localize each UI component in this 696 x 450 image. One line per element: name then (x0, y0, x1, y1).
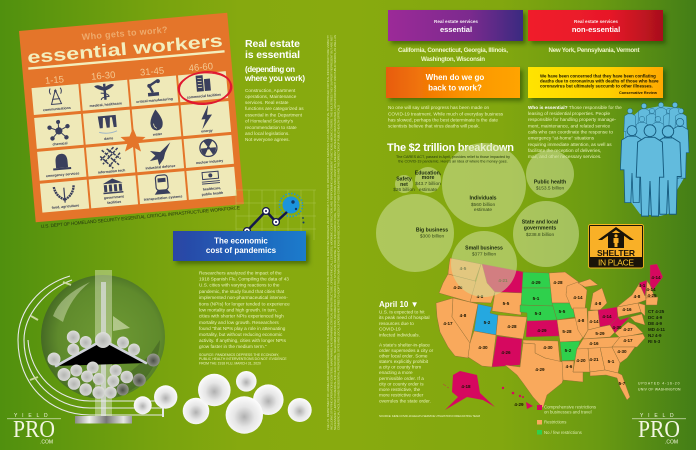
text block: back to work body: scientists believe that virus deaths will peak. (388, 124, 480, 129)
state date labels: 4-8 (634, 294, 641, 299)
text block: who is essential (528, 105, 622, 159)
text block: pandemics body: pandemic, the study found that cities that (199, 289, 285, 294)
list: essential states: California, Connecticut, Georgia, Illinois, (398, 47, 508, 54)
icon: information tech: information tech (98, 168, 125, 175)
source caption: U.S. DEPT OF HOMELAND SECURITY ESSENTIAL CRITICAL INFRASTRUCTURE WORKFORCE (41, 205, 240, 229)
text block: April 10 body: U.S. is expected to hit (379, 310, 425, 314)
heading: real estate is essential: Real estate (245, 38, 300, 50)
icon: transportation systems (142, 173, 183, 202)
title: essential workers: essential workers (26, 30, 224, 67)
state date labels: 5-29 (595, 331, 605, 336)
panel: conservative review quote: We have been concerned that they have been conflating (540, 74, 656, 78)
text block: pandemics body: activity. If anything, cities with longer NPIs (199, 338, 287, 343)
text block: pandemics body: Researchers analyzed the impact of the (199, 270, 282, 276)
bubble labels (393, 170, 566, 258)
panel: conservative review quote (528, 67, 663, 98)
state date labels: 5-2 (565, 348, 572, 353)
icon: energy: energy (201, 129, 213, 133)
states: Alaska and Hawaii (443, 371, 533, 410)
state date labels: 5-5 (503, 301, 510, 306)
states: east (566, 264, 663, 400)
panel: economic cost of pandemics: cost of pandemics (206, 246, 277, 255)
state date labels: 5-28 (562, 329, 572, 334)
text block: real estate body (245, 88, 304, 142)
state date labels: 5-5 (559, 309, 566, 314)
state date labels: 4-8 (460, 313, 467, 318)
state date labels: 4-8 (578, 318, 585, 323)
update note (638, 382, 681, 392)
icon: industrial defense (143, 142, 176, 170)
state date labels: 4-30 (543, 345, 553, 350)
illustration: lottery machine (18, 270, 165, 424)
icon: food, agriculture (50, 184, 79, 210)
text block: back to work body (388, 105, 504, 129)
bubble labels: $26 billion (393, 187, 415, 193)
text block: April 10 body: COVID-19 (379, 326, 401, 332)
bubble labels: Individuals (469, 196, 497, 202)
state date labels (443, 266, 661, 407)
text block: April 10 body: state's explicitly prohibit (379, 359, 429, 364)
text block: pandemics body: low mortality and high growth. In turn, (199, 308, 277, 312)
text block: April 10 body: more restrictive order (379, 392, 424, 398)
subtitle: CARES Act: The CARES ACT, passed in April, provides relief to those impacted by (396, 155, 510, 159)
state date labels: 4-18 (461, 384, 471, 389)
states: central (505, 272, 583, 408)
state date labels: 4-17 (443, 321, 453, 326)
source: pandemics: PUBLIC HEALTH INTERVENTIONS DO NOT: EVIDENCE (199, 357, 287, 361)
list: small state dates: CT 4-25 (648, 309, 665, 314)
state date labels: 5-1 (533, 296, 540, 301)
state date labels: 4-17 (623, 338, 633, 343)
icon: medical (88, 82, 122, 108)
state date labels: 4-30 (617, 349, 627, 354)
vertical fine print (326, 35, 340, 430)
legend: map restrictions: Comprehensive restrictions (544, 404, 596, 410)
heading: 2 trillion breakdown: The $2 trillion breakdown (387, 142, 514, 154)
text block: who is essential: facilitate the reception of deliveries, (528, 148, 601, 153)
text block: pandemics body: 1918 Spanish Flu. Compiling the data of 43 (199, 276, 289, 282)
legend: map restrictions: Restrictions (544, 420, 566, 424)
text block: April 10 body: permissible order. If a (379, 376, 424, 381)
panel: when do we go back to work (386, 67, 520, 98)
panel: conservative review quote: Conservative Review (619, 91, 657, 95)
icon: healthcare, public health (200, 171, 223, 197)
state date labels: 4-14 (651, 275, 661, 280)
text block: real estate body: Construction, Apartment (245, 88, 296, 93)
text block: pandemics body: mortality and low growth. Researchers (199, 320, 279, 325)
icon: dams (98, 115, 118, 141)
text block: April 10 body: a city or county from (379, 364, 421, 370)
vertical fine print: INCLUDING STAFFING OPERATIONS CENTERS, MAINTAINING AND REPAIRING CRITICAL INFRASTRUCTURE, OPERATING CALL CENTERS, WORKING CONSTRUCTION, AND PERFORMING MANAGEMENT FUNCTIONS, AMONG OTHERS. THE INDUSTRIES THEY SUPPORT REPRESENT BUT ARE NOT (330, 35, 334, 430)
highlight: red circle around commercial facilities (177, 69, 233, 107)
text block: who is essential: Who is essential? Those responsible for the (528, 105, 622, 110)
text block: April 10 body: city or county order is (379, 382, 424, 386)
logo: yield pro left: PRO (13, 417, 55, 443)
state date labels: 4-28 (553, 280, 563, 285)
icon: commercial facilities (185, 74, 221, 100)
rails (18, 276, 163, 417)
balls inside drum (48, 330, 160, 399)
icon: energy (199, 105, 214, 133)
icon: government facilities: government (104, 194, 125, 200)
text block: who is essential: emergency "at-home" situations (528, 136, 595, 140)
state date labels: 4-26 (453, 285, 463, 290)
text block: pandemics body: tions (NPIs) for longer tended to experience (199, 302, 290, 306)
state date labels: 4-14 (646, 287, 656, 292)
update note: UNIV OF WASHINGTON (638, 388, 681, 392)
bubble labels: $300 billion (420, 234, 444, 240)
state date labels: 4-21 (589, 357, 599, 362)
text block: April 10 body: infected individuals. (379, 332, 420, 338)
panel: essential states: essential (440, 25, 472, 34)
vertical fine print: THE U.S. DEPARTMENT OF HOMELAND SECURITY GUIDANCE ON THE ESSENTIAL CRITICAL INFRASTRUCTURE WORKFORCE IDENTIFIES WORKERS WHO CONDUCT A RANGE OF OPERATIONS AND SERVICES THAT ARE ESSENTIAL TO CONTINUED CRITICAL INFRASTRUCTURE VIABILITY (326, 35, 330, 430)
panel: non-essential states: Real estate services (574, 19, 618, 24)
icon: shelter in place sign: SHELTER (597, 248, 635, 258)
logo: yield pro right: PRO (638, 417, 680, 443)
list: small state dates: DC 4-9 (648, 315, 663, 320)
text block: who is essential: mail, and other necessary services. (528, 154, 601, 159)
logo: yield pro right (632, 413, 686, 446)
text block: real estate body: services. Real estate (245, 100, 289, 105)
column headers: 16-30 (91, 70, 116, 83)
bubble labels: Public health (534, 180, 566, 186)
panel: essential states (388, 10, 523, 41)
text block: April 10 body: A state's shelter-in-place (379, 342, 430, 348)
state date labels: 4-1 (639, 283, 646, 288)
legend: map restrictions: on businesses and travel (544, 410, 592, 414)
state date labels: 5-7 (619, 381, 626, 386)
state date labels: 4-26 (501, 350, 511, 355)
icon: communications (41, 87, 71, 112)
state date labels: 4-29 (535, 367, 545, 372)
state date labels: 5-2 (484, 320, 491, 325)
illustration: crowd of workers (620, 102, 689, 216)
state date labels: 4-14 (602, 314, 612, 319)
state date labels: 4-25 (647, 293, 657, 298)
icon: transportation systems: transportation systems (144, 194, 183, 202)
bubble labels: Education, (415, 170, 442, 176)
text block: pandemics body: found "that NPIs play a role in attenuating (199, 326, 286, 331)
panel: essential states: Real estate services (434, 19, 478, 24)
icon: chemical (47, 119, 71, 147)
vertical fine print: COMMERCIAL FACILITIES AND RESIDENTIAL PROPERTIES. STATE AND LOCAL LEADERS ARE FREE TO ADOPT THEIR OWN RECOMMENDATIONS BASED ON THE NEEDS OF THEIR COMMUNITIES AND THE DIRECTION OF PUBLIC HEALTH OFFICIALS (336, 105, 340, 430)
icon: government facilities (102, 177, 125, 205)
heading: real estate is essential: where you work) (244, 74, 305, 83)
bubble labels: governments (524, 226, 556, 232)
icon: water: water (152, 132, 163, 137)
text block: pandemics body: cities with shorter NPIs experienced high (199, 314, 284, 318)
star (120, 128, 146, 152)
state date labels: 4-28 (507, 324, 517, 329)
state date labels: 4-14 (573, 295, 583, 300)
text block: pandemics body: mortality, but without reducing economic (199, 332, 283, 337)
logo: yield pro left (7, 413, 61, 446)
subtitle: CARES Act: the COVID-19 pandemic. Here's an idea of where the money goes. (398, 160, 508, 164)
text block: pandemics body: U.S. cities with varying reactions to the (199, 282, 280, 288)
icon: critical manufacturing: critical manufacturing (136, 97, 173, 104)
icon: government facilities: facilities (107, 200, 121, 205)
source: map: SOURCE: IHME COVID-19 HEALTH SERVICE UTILIZATION FORECASTING TEAM (379, 414, 481, 418)
text block: April 10 body: other local order. Some (379, 354, 428, 358)
vertical fine print: NECESSARILY LIMITED TO MEDICAL AND HEALTHCARE, TELECOMMUNICATIONS, INFORMATION TECHNOLOGY SYSTEMS, DEFENSE, FOOD AND AGRICULTURE, TRANSPORTATION AND LOGISTICS, ENERGY, WATER AND WASTEWATER, LAW ENFORCEMENT AND PUBLIC WORKS, AS WELL AS (333, 35, 337, 430)
text block: pandemics body (199, 270, 290, 349)
state date labels: 4-6 (566, 364, 573, 369)
icon: healthcare, public health: healthcare, (203, 186, 221, 192)
list: small state dates: DE 4-9 (648, 321, 663, 326)
icon: chemical: chemical (52, 141, 68, 147)
text block: who is essential: calls who can coordinate the response to (528, 130, 613, 134)
state date labels: 4-27 (623, 327, 633, 332)
column headers (45, 61, 213, 87)
icon: emergency services (44, 152, 80, 178)
legend: map restrictions: No / few restrictions (544, 430, 582, 435)
state date labels: 5-3 (535, 311, 542, 316)
bubble labels: Big business (416, 228, 448, 234)
subtitle: CARES Act (396, 155, 510, 164)
icon: industrial defense: industrial defense (145, 164, 176, 170)
bubble labels: Safety (396, 176, 412, 182)
state date labels: 4-29 (531, 280, 541, 285)
logo: yield pro right: YIELD (640, 413, 678, 419)
state date labels: 4-8 (477, 294, 484, 299)
text block: real estate body: recommendation to state (245, 125, 297, 130)
icon: healthcare, public health: public health (201, 191, 223, 197)
state date labels: 4-5 (460, 266, 467, 271)
text block: who is essential: leasing of residential properties. People (528, 111, 610, 116)
text block: pandemics body: grow faster in the medium term." (199, 344, 267, 349)
text block: real estate body: Not everyone agrees. (245, 137, 290, 142)
panel: conservative review quote: deaths due to coronavirus with deaths of those who have (540, 79, 659, 84)
chart: spending bubbles (376, 143, 579, 297)
states: west (436, 258, 527, 367)
bubble labels: estimate (419, 187, 437, 193)
bubble labels: net (400, 182, 408, 188)
column headers: 31-45 (139, 66, 165, 79)
state date labels: 4-16 (622, 307, 632, 312)
text block: who is essential: responsible for handling property manage- (528, 117, 617, 122)
icon: dams: dams (104, 136, 113, 141)
panel: when do we go back to work: back to work? (428, 84, 482, 92)
icon: information tech (96, 146, 125, 175)
icon: shelter in place sign: IN PLACE (598, 258, 634, 268)
state date labels: 4-16 (589, 341, 599, 346)
update note: UPDATED 4-16-20 (638, 382, 680, 386)
illustration: loose balls (134, 371, 312, 434)
legend: map restrictions (537, 404, 596, 435)
text block: real estate body: and local legislations. (245, 131, 290, 136)
text block: who is essential: ment, maintenance, and related service (528, 124, 610, 128)
state date labels: 4-29 (537, 328, 547, 333)
text block: April 10 body: enacting a more (379, 370, 413, 375)
text block: back to work body: has slowed, perhaps the best determinate is the date (388, 118, 498, 123)
logo: yield pro left: .COM (40, 440, 53, 446)
bubble labels: $43.7 billion (415, 181, 441, 187)
icon: shelter in place sign (588, 224, 644, 268)
state date labels: 4-30 (612, 325, 622, 330)
bubble labels: more (422, 175, 434, 181)
source: pandemics: SOURCE: PANDEMICS DEPRESS THE ECONOMY, (199, 353, 279, 357)
text block: real estate body: essential in the Department (245, 112, 303, 118)
bubble labels: State and local (522, 220, 559, 226)
panel: conservative review quote: coronavirus but ultimately succumb to other illnesses. (540, 84, 653, 89)
text block: pandemics body: implemented non-pharmaceutical interven- (199, 295, 288, 300)
icon: water (149, 109, 164, 137)
bubble labels: estimate (474, 207, 492, 213)
bubble labels: $560 billion (471, 202, 495, 208)
list: small state dates: NJ 4-9 (648, 333, 662, 338)
state date labels: 4-30 (478, 345, 488, 350)
icon: emergency services: emergency services (46, 171, 80, 178)
panel: economic cost of pandemics: The economic (214, 236, 268, 246)
list: small state dates (648, 309, 666, 344)
bubble labels: $238.8 billion (526, 232, 554, 238)
panel: essential workers card (19, 13, 244, 222)
text block: real estate body: operations, Maintenance (245, 94, 297, 99)
heading: real estate is essential: is essential (245, 49, 300, 61)
list: essential states (398, 47, 508, 63)
list: non-essential states: New York, Pennsylvania, Vermont (548, 47, 640, 54)
icon grid (32, 71, 237, 213)
state date labels: 4-20 (576, 358, 586, 363)
icon: food, agriculture: food, agriculture (52, 203, 79, 210)
text block: April 10 body: resources due to (379, 321, 414, 326)
text block: who is essential: requiring immediate attention, as well as (528, 142, 612, 147)
text block: April 10 body: more restrictive, the (379, 387, 421, 392)
column headers: 1-15 (45, 74, 64, 87)
panel: economic cost of pandemics (173, 231, 306, 261)
list: small state dates: RI 5-3 (648, 339, 661, 344)
heading: real estate is essential: (depending on (245, 65, 295, 74)
icon: communications: communications (43, 106, 71, 112)
icon: critical manufacturing (135, 78, 173, 104)
state date labels: 4-8 (595, 301, 602, 306)
icon: nuclear industry (194, 138, 223, 165)
state date labels: 4-21 (498, 278, 508, 283)
text block: real estate body: of Homeland Security's (245, 118, 294, 124)
list: small state dates: MD 4-11 (648, 327, 666, 332)
panel: when do we go back to work: When do we go (426, 73, 484, 82)
heading: real estate is essential (244, 38, 305, 83)
text block: real estate body: functions are categorized as (245, 106, 304, 111)
source: pandemics: FROM THE 1918 FLU, MARCH 31, 2020 (199, 362, 261, 366)
panel: non-essential states (528, 10, 663, 41)
column headers: 46-60 (188, 61, 213, 74)
icon: commercial facilities: commercial facilities (187, 93, 221, 100)
icon: medical: medical, healthcare (89, 101, 122, 108)
state date labels: 4-14 (589, 319, 599, 324)
panel: non-essential states: non-essential (572, 25, 620, 34)
text block: April 10 body: its peak need of hospital (379, 315, 430, 320)
logo: yield pro right: .COM (665, 440, 678, 446)
chart icon: virus and trend line (236, 190, 316, 240)
map: US shelter-in-place dates (436, 258, 663, 410)
bubble labels: $377 billion (472, 252, 496, 258)
bubble labels: $153.5 billion (536, 186, 564, 192)
source: pandemics (199, 353, 287, 366)
heading: who gets to work: Who gets to work? (81, 25, 168, 42)
text block: April 10 body: overrules the state order. (379, 398, 431, 404)
text block: April 10 body: order supersedes a city or (379, 348, 434, 353)
icon: nuclear industry: nuclear industry (196, 159, 223, 165)
state date labels: 4-29 (514, 402, 524, 407)
state date labels: 5-1 (608, 359, 615, 364)
bubble labels: Small business (465, 246, 503, 252)
text block: back to work body: No one will say until progress has been made on (388, 105, 489, 110)
text block: back to work body: COVID-19 treatment. While much of everyday business (388, 112, 504, 117)
text block: April 10 body (379, 310, 434, 404)
heading: April 10: April 10 ▼ (379, 300, 418, 309)
logo: yield pro left: YIELD (14, 413, 52, 419)
list: essential states: Washington, Wisconsin (421, 56, 485, 63)
